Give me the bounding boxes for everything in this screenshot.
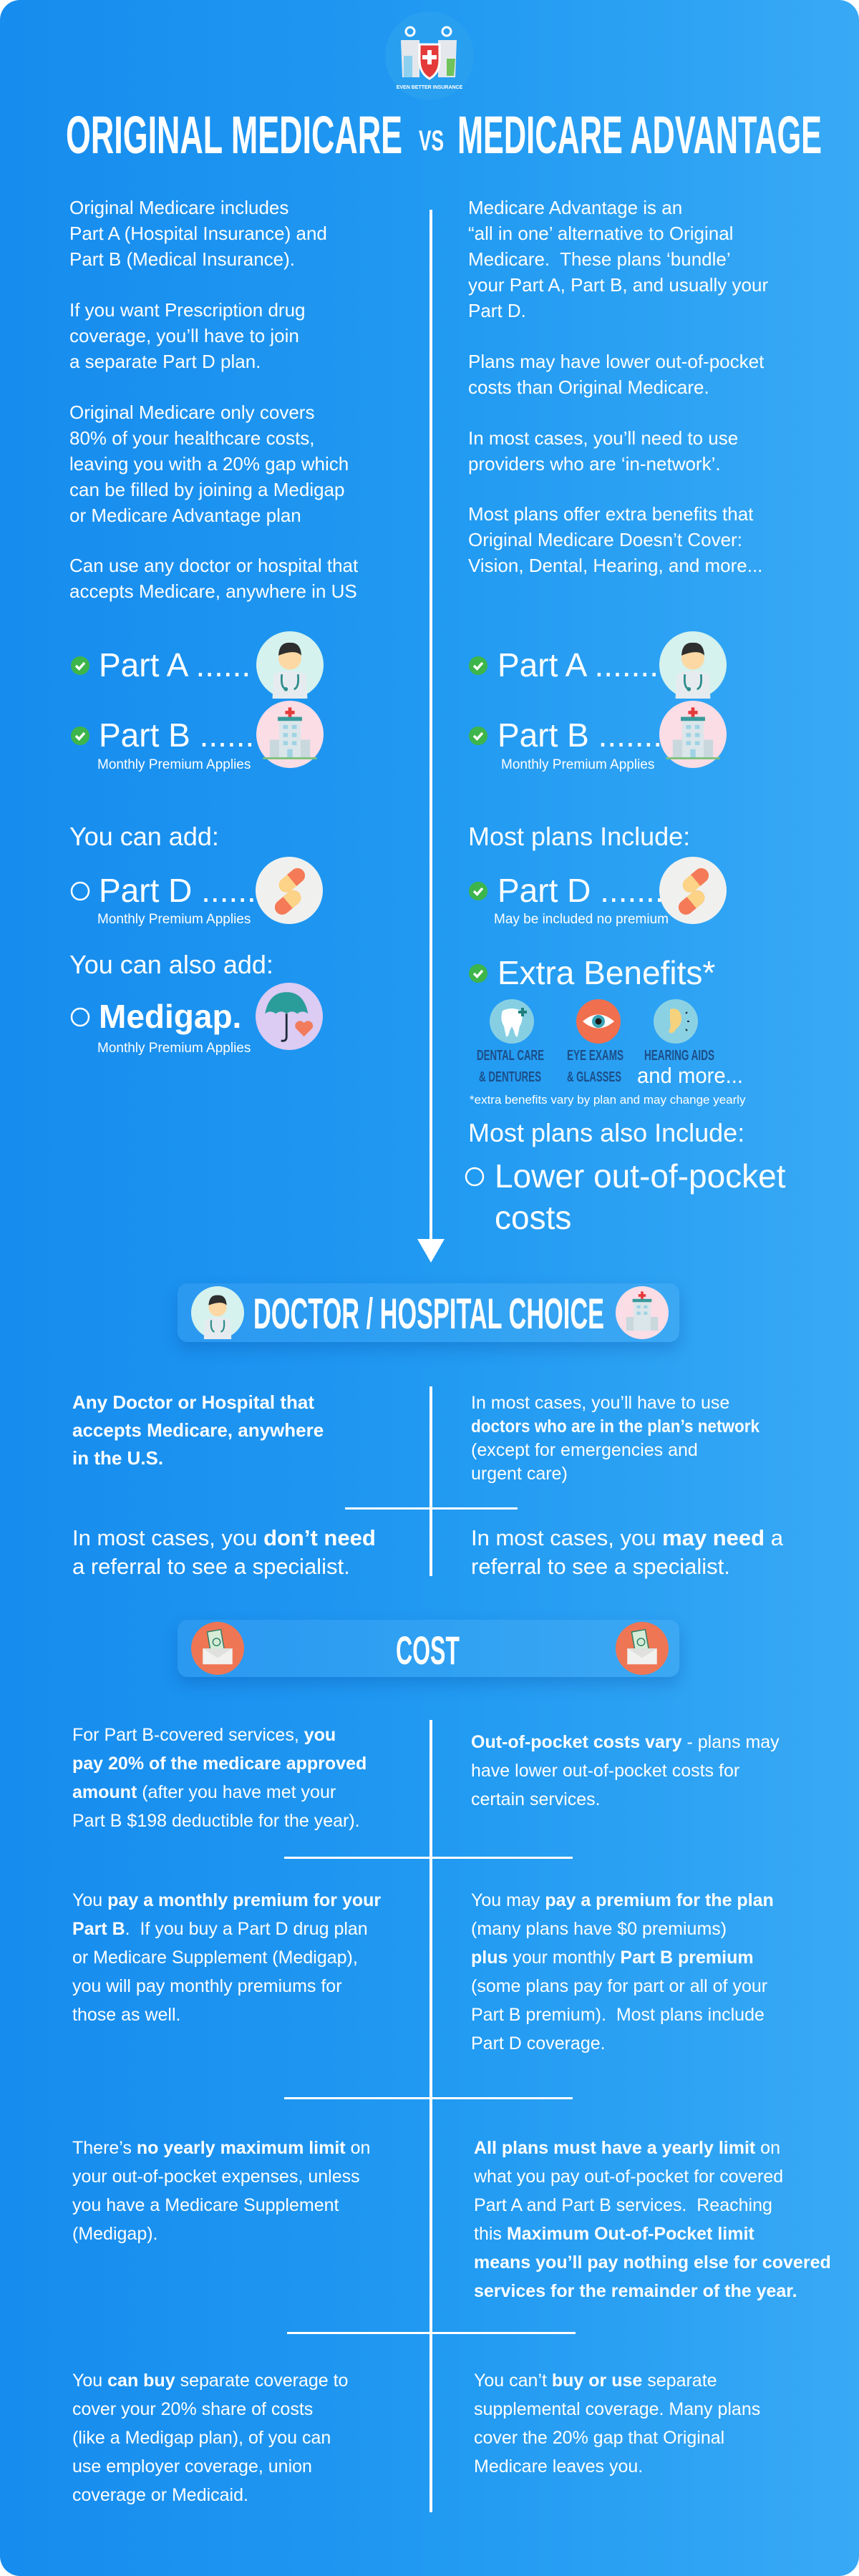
part B left [71, 716, 254, 772]
icon: hospital left [256, 701, 324, 768]
lower out-of-pocket [465, 1157, 786, 1236]
doctor choice left: accepts Medicare, anywhere [72, 1419, 324, 1441]
cost 2 right: Part B premium). Most plans include [471, 2005, 765, 2025]
cost 1 left: Part B $198 deductible for the year). [72, 1811, 360, 1831]
benefit icons [477, 999, 714, 1064]
cost 2 left [72, 1890, 381, 2025]
part B right: Monthly Premium Applies [501, 757, 654, 772]
left intro text: Can use any doctor or hospital that [69, 555, 358, 576]
cost 4 left: use employer coverage, union [72, 2456, 312, 2477]
divider arrow [417, 210, 445, 1263]
left intro text: or Medicare Advantage plan [69, 505, 301, 526]
lower out-of-pocket: costs [495, 1199, 571, 1236]
benefit labels row 2: and more... [637, 1063, 743, 1088]
right intro text: Medicare. These plans ‘bundle’ [468, 248, 731, 270]
cost 1 left [72, 1725, 367, 1831]
doctor choice right: In most cases, you’ll have to use [471, 1393, 729, 1413]
cost 4 left: coverage or Medicaid. [72, 2485, 248, 2505]
right intro text: Vision, Dental, Hearing, and more... [468, 555, 762, 576]
left intro text: 80% of your healthcare costs, [69, 427, 315, 449]
icon: money envelope right [616, 1622, 669, 1675]
cost 3 right: means you’ll pay nothing else for covered [474, 2252, 831, 2273]
medigap: Medigap. [99, 998, 241, 1035]
part D right: Part D ....... [498, 872, 664, 909]
you can add: You can add: [69, 822, 219, 851]
cost 1 left: pay 20% of the medicare approved [72, 1754, 367, 1774]
cost 2 right [471, 1890, 774, 2053]
icon: pills right [659, 857, 727, 924]
left intro text [69, 197, 358, 602]
right intro text: Most plans offer extra benefits that [468, 503, 753, 525]
logo: EVEN BETTER INSURANCE [397, 85, 463, 90]
part B right [469, 716, 662, 772]
icon: money envelope left [191, 1622, 244, 1675]
right intro text [468, 197, 768, 576]
doctor choice right: urgent care) [471, 1464, 568, 1484]
benefit labels row 2: & GLASSES [567, 1069, 621, 1085]
doctor choice right: doctors who are in the plan’s network [471, 1416, 759, 1437]
most plans include: Most plans Include: [468, 822, 690, 851]
you can also add: You can also add: [69, 950, 273, 979]
cost 2 left: Part B. If you buy a Part D drug plan [72, 1919, 368, 1939]
cost 4 right [474, 2366, 810, 2481]
referral left [72, 1525, 376, 1579]
referral left: In most cases, you don’t need [72, 1525, 376, 1550]
left intro text: Part B (Medical Insurance). [69, 248, 295, 270]
cost 2 right: plus your monthly Part B premium [471, 1948, 754, 1968]
cost 3 right: what you pay out-of-pocket for covered [474, 2167, 783, 2187]
cost 4 right: supplemental coverage. Many plans [474, 2399, 760, 2419]
medigap: Monthly Premium Applies [97, 1041, 251, 1056]
icon: umbrella [256, 983, 323, 1050]
cost 3 left: you have a Medicare Supplement [72, 2195, 339, 2215]
part B left: Monthly Premium Applies [97, 757, 251, 772]
left intro text: leaving you with a 20% gap which [69, 453, 349, 475]
title: VS [419, 125, 444, 157]
benefit icons: HEARING AIDS [644, 1048, 714, 1064]
cost 3 right [474, 2138, 831, 2301]
cost 2 left: You pay a monthly premium for your [72, 1890, 381, 1910]
cost 4 left: cover your 20% share of costs [72, 2399, 313, 2419]
cost 1 left: amount (after you have met your [72, 1782, 336, 1802]
cost 1 right [471, 1732, 780, 1809]
referral right: In most cases, you may need a [471, 1525, 783, 1550]
banner: cost [178, 1620, 679, 1677]
right intro text: Original Medicare Doesn’t Cover: [468, 529, 742, 550]
benefit icons: EYE EXAMS [567, 1048, 623, 1064]
referral right [471, 1525, 783, 1579]
cost 2 right: (many plans have $0 premiums) [471, 1919, 727, 1939]
part D left: Part D ...... [99, 872, 256, 909]
icon: doctor left [256, 631, 324, 699]
cost 2 left: those as well. [72, 2005, 180, 2025]
most plans also include: Most plans also Include: [468, 1118, 744, 1147]
left intro text: Original Medicare includes [69, 197, 288, 218]
right intro text: Plans may have lower out-of-pocket [468, 351, 764, 372]
icon: hospital banner [616, 1286, 669, 1339]
left coverage list [69, 646, 273, 1056]
icon: hospital right [659, 701, 727, 768]
part D right [469, 872, 669, 927]
banner: doctor / hospital choice [178, 1283, 679, 1342]
lower out-of-pocket: Lower out-of-pocket [495, 1157, 786, 1195]
logo [385, 11, 463, 100]
cost 3 right: Part A and Part B services. Reaching [474, 2195, 772, 2215]
left intro text: Original Medicare only covers [69, 402, 314, 423]
part B left: Part B ...... [99, 716, 254, 754]
cost 2 right: (some plans pay for part or all of your [471, 1976, 767, 1996]
left intro text: a separate Part D plan. [69, 351, 261, 372]
cost 4 left: (like a Medigap plan), of you can [72, 2428, 331, 2448]
left intro text: Part A (Hospital Insurance) and [69, 223, 327, 244]
cost 1 right: Out-of-pocket costs vary - plans may [471, 1732, 780, 1752]
part D left: Monthly Premium Applies [97, 912, 251, 927]
footnote: *extra benefits vary by plan and may change yearly [470, 1093, 746, 1107]
medigap [70, 998, 251, 1056]
part B right: Part B ....... [498, 716, 662, 754]
right intro text: In most cases, you’ll need to use [468, 427, 738, 449]
cost 4 left: You can buy separate coverage to [72, 2371, 348, 2391]
left intro text: accepts Medicare, anywhere in US [69, 580, 357, 602]
cost 4 right: cover the 20% gap that Original [474, 2428, 724, 2448]
doctor choice left: Any Doctor or Hospital that [72, 1391, 314, 1413]
cost 4 left [72, 2371, 348, 2505]
left intro text: If you want Prescription drug [69, 299, 305, 321]
cost 2 right: Part D coverage. [471, 2033, 606, 2053]
doctor choice right: (except for emergencies and [471, 1440, 698, 1460]
cost 2 left: you will pay monthly premiums for [72, 1976, 342, 1996]
icon: doctor banner [191, 1286, 244, 1339]
left intro text: can be filled by joining a Medigap [69, 479, 344, 500]
cost 3 left: (Medigap). [72, 2224, 157, 2244]
right intro text: providers who are ‘in-network’. [468, 453, 721, 475]
part D left [70, 872, 256, 927]
cost 3 right: this Maximum Out-of-Pocket limit [474, 2224, 754, 2244]
cost 3 right: All plans must have a yearly limit on [474, 2138, 780, 2158]
part D right: May be included no premium [494, 912, 669, 927]
icon: pills left [256, 857, 323, 924]
benefit labels row 2 [479, 1063, 743, 1088]
cost 2 left: or Medicare Supplement (Medigap), [72, 1948, 358, 1968]
benefit labels row 2: & DENTURES [479, 1069, 541, 1085]
cost 2 right: You may pay a premium for the plan [471, 1890, 774, 1910]
cost 3 left [72, 2138, 370, 2244]
referral right: referral to see a specialist. [471, 1554, 730, 1579]
cost 1 right: certain services. [471, 1789, 601, 1809]
right intro text: Part D. [468, 300, 526, 321]
cost 1 right: have lower out-of-pocket costs for [471, 1761, 739, 1781]
cost 3 left: There’s no yearly maximum limit on [72, 2138, 370, 2158]
right coverage list [465, 646, 786, 1236]
right intro text: your Part A, Part B, and usually your [468, 274, 768, 296]
cost 4 right: You can’t buy or use separate [474, 2371, 717, 2391]
doctor choice right [471, 1393, 759, 1484]
cost 3 left: your out-of-pocket expenses, unless [72, 2167, 360, 2187]
cost 1 left: For Part B-covered services, you [72, 1725, 336, 1745]
right intro text: costs than Original Medicare. [468, 376, 709, 398]
cost 4 right: Medicare leaves you. [474, 2456, 643, 2477]
left intro text: coverage, you’ll have to join [69, 325, 299, 346]
part A right: Part A ....... [498, 646, 659, 684]
extra benefits: Extra Benefits* [498, 954, 715, 991]
right intro text: “all in one’ alternative to Original [468, 223, 733, 244]
benefit icons: DENTAL CARE [477, 1048, 544, 1064]
doctor choice left: in the U.S. [72, 1447, 163, 1469]
icon: doctor right [659, 631, 727, 699]
part A left: Part A ...... [99, 646, 251, 684]
right intro text: Medicare Advantage is an [468, 197, 682, 218]
cost 3 right: services for the remainder of the year. [474, 2281, 797, 2301]
referral left: a referral to see a specialist. [72, 1554, 350, 1579]
doctor choice left [72, 1391, 324, 1469]
